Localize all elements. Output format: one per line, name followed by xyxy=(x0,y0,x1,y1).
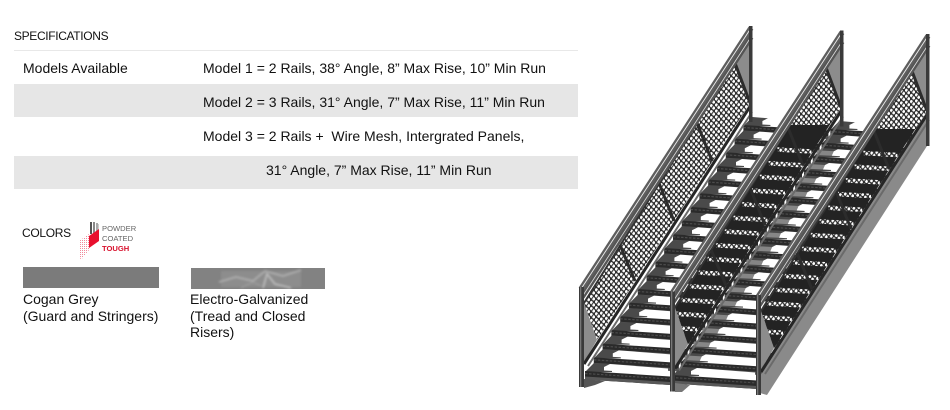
caption: electro-galvanized: Electro-Galvanized xyxy=(190,291,308,307)
stringer: right outer face xyxy=(760,115,927,395)
stringer feet xyxy=(584,379,690,392)
mesh panel: left guard xyxy=(584,63,750,340)
guard: right rail xyxy=(756,34,930,395)
caption: cogan grey: (Guard and Stringers) xyxy=(23,308,158,324)
mesh panel: middle guard xyxy=(663,68,841,344)
caption: cogan grey xyxy=(23,291,158,324)
logo: powder coated tough: TOUGH xyxy=(102,244,129,253)
guard: left rail xyxy=(579,26,752,387)
row band: model 2 xyxy=(14,84,578,117)
label: models available: Models Available xyxy=(23,60,128,76)
caption: electro-galvanized: Risers) xyxy=(190,324,234,340)
logo: powder coated tough xyxy=(80,222,137,259)
logo: powder coated tough: POWDER xyxy=(102,224,137,233)
caption: cogan grey: Cogan Grey xyxy=(23,291,98,307)
swatch: cogan grey xyxy=(23,267,159,288)
illustration: three-flight stair xyxy=(578,26,930,395)
spec: model 3: Model 3 = 2 Rails + Wire Mesh, Intergrated Panels, xyxy=(203,128,524,144)
spec: model 1: Model 1 = 2 Rails, 38° Angle, 8” Max Rise, 10” Min Run xyxy=(203,60,546,76)
treads: left flight xyxy=(585,117,828,385)
logo: powder coated tough: COATED xyxy=(102,234,134,243)
caption: electro-galvanized: (Tread and Closed xyxy=(190,308,305,324)
spec: model 3 continued: 31° Angle, 7” Max Rise, 11” Min Run xyxy=(266,162,492,178)
row band: model 3 continuation xyxy=(14,156,578,189)
mesh panel: right guard xyxy=(749,71,927,348)
heading: colors: COLORS xyxy=(22,226,71,240)
swatch: electro-galvanized xyxy=(191,268,325,289)
guard: middle rail xyxy=(670,30,844,392)
treads: right flight xyxy=(672,121,915,389)
heading: specifications: SPECIFICATIONS xyxy=(14,29,108,43)
spec: model 2: Model 2 = 3 Rails, 31° Angle, 7” Max Rise, 11” Min Run xyxy=(203,94,545,110)
caption: electro-galvanized xyxy=(190,291,308,340)
